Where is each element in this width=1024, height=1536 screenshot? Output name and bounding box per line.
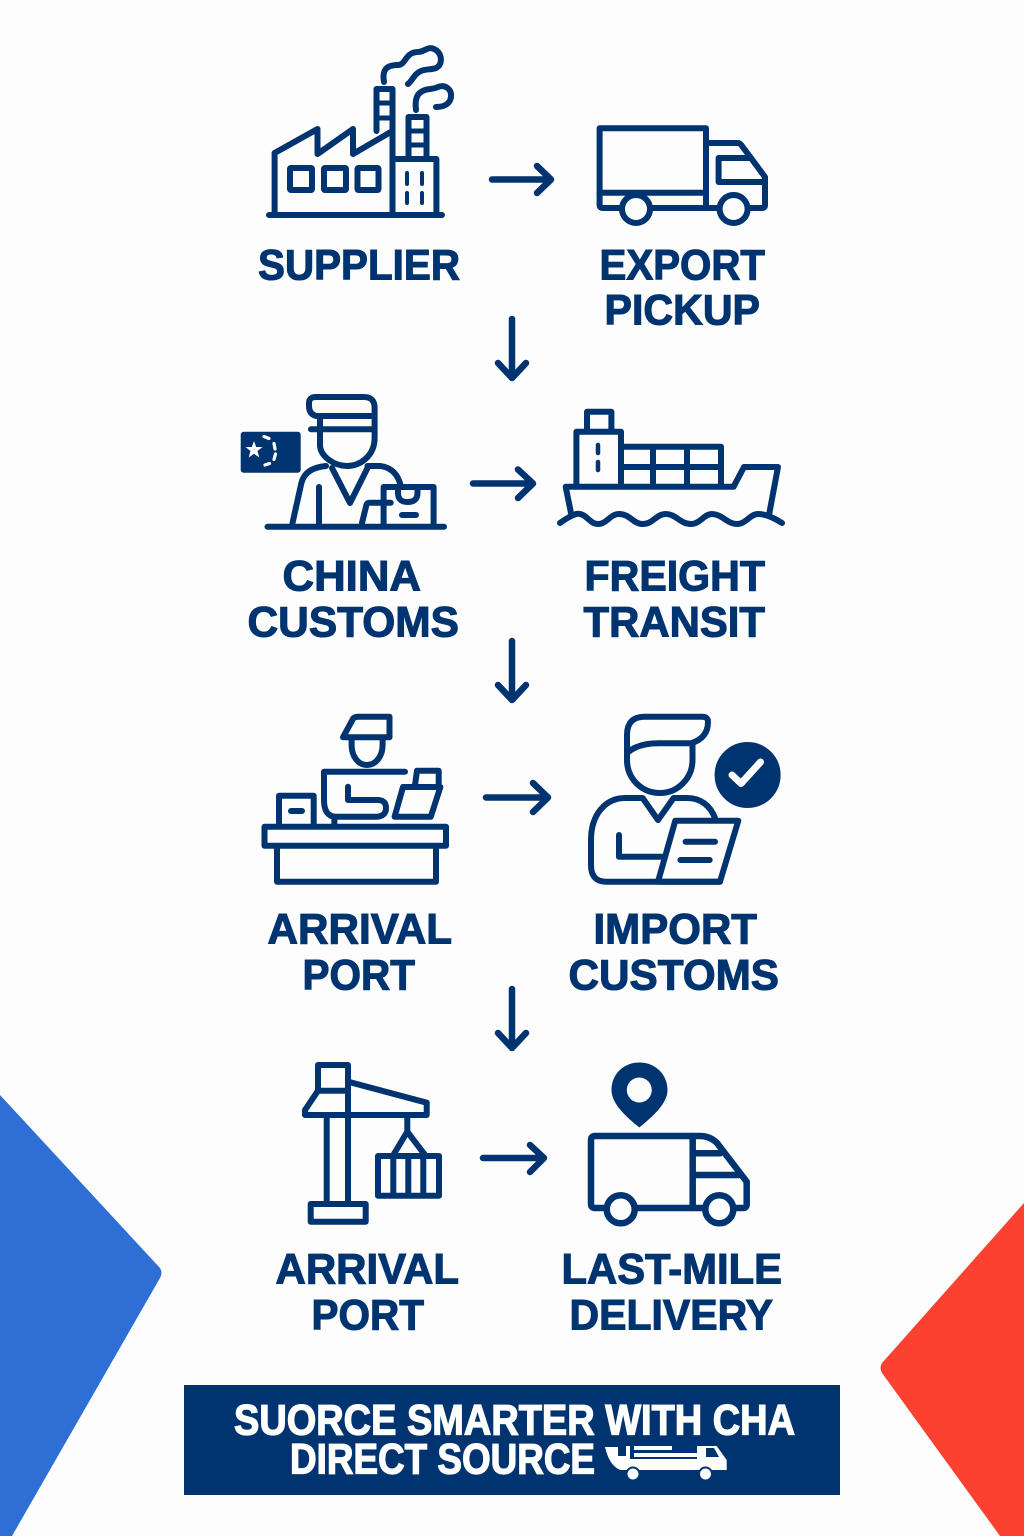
banner text: DIRECT SOURCE	[290, 1436, 595, 1484]
icon: container ship	[560, 412, 782, 524]
arrow: down to arrival port	[498, 641, 526, 700]
step: import customs	[568, 717, 779, 1000]
icon: port crane with container	[305, 1065, 439, 1222]
banner text: SUORCE SMARTER WITH CHA	[234, 1396, 795, 1444]
arrow: down to crane step	[498, 989, 526, 1048]
label: freight transit: TRANSIT	[584, 598, 765, 646]
label: import customs: CUSTOMS	[568, 952, 779, 1000]
icon: customs officer	[268, 397, 444, 527]
label: supplier: SUPPLIER	[258, 242, 460, 290]
arrow: arrival port to import customs	[486, 783, 548, 812]
step: china customs	[241, 397, 459, 646]
icon: flag of china	[241, 432, 301, 473]
step: arrival port crane	[276, 1065, 459, 1340]
label: china customs: CUSTOMS	[248, 598, 459, 646]
icon: location pin	[612, 1062, 668, 1128]
label: china customs: CHINA	[282, 552, 421, 600]
step: last-mile delivery	[562, 1062, 782, 1340]
label: arrival port: ARRIVAL	[268, 906, 452, 954]
step: supplier	[258, 48, 460, 289]
icon: truck	[600, 128, 765, 223]
label: arrival port	[276, 1246, 459, 1340]
label: import customs: IMPORT	[594, 906, 757, 954]
label: arrival port: PORT	[312, 1292, 424, 1340]
label: freight transit: FREIGHT	[584, 552, 765, 600]
step: export pickup	[600, 128, 765, 334]
label: arrival port: ARRIVAL	[276, 1246, 459, 1294]
icon: white truck	[605, 1446, 727, 1480]
label: export pickup: PICKUP	[604, 286, 760, 334]
icon: factory	[269, 48, 451, 215]
label: import customs	[568, 906, 779, 1000]
arrow: crane to last-mile delivery	[483, 1145, 544, 1172]
red corner shape	[880, 1203, 1024, 1536]
label: arrival port	[268, 906, 452, 1000]
label: last-mile delivery: DELIVERY	[570, 1292, 773, 1340]
label: export pickup	[600, 242, 765, 334]
label: arrival port: PORT	[302, 952, 415, 1000]
step: freight transit	[560, 412, 782, 646]
step: arrival port desk	[264, 717, 452, 1000]
label: last-mile delivery: LAST-MILE	[562, 1246, 782, 1294]
label: last-mile delivery	[562, 1246, 782, 1340]
arrow: supplier to export pickup	[492, 166, 551, 193]
label: freight transit	[584, 552, 765, 646]
blue corner shape	[0, 1095, 162, 1536]
icon: delivery van	[591, 1136, 747, 1223]
arrow: down to china customs	[498, 319, 526, 378]
icon: check badge	[718, 745, 778, 805]
label: china customs	[248, 552, 459, 646]
icon: port officer at desk	[264, 717, 446, 882]
banner text	[234, 1396, 795, 1484]
icon: customs agent with document	[591, 717, 778, 882]
arrow: china customs to freight transit	[473, 470, 533, 498]
label: export pickup: EXPORT	[600, 242, 765, 290]
banner: call to action	[184, 1385, 840, 1495]
